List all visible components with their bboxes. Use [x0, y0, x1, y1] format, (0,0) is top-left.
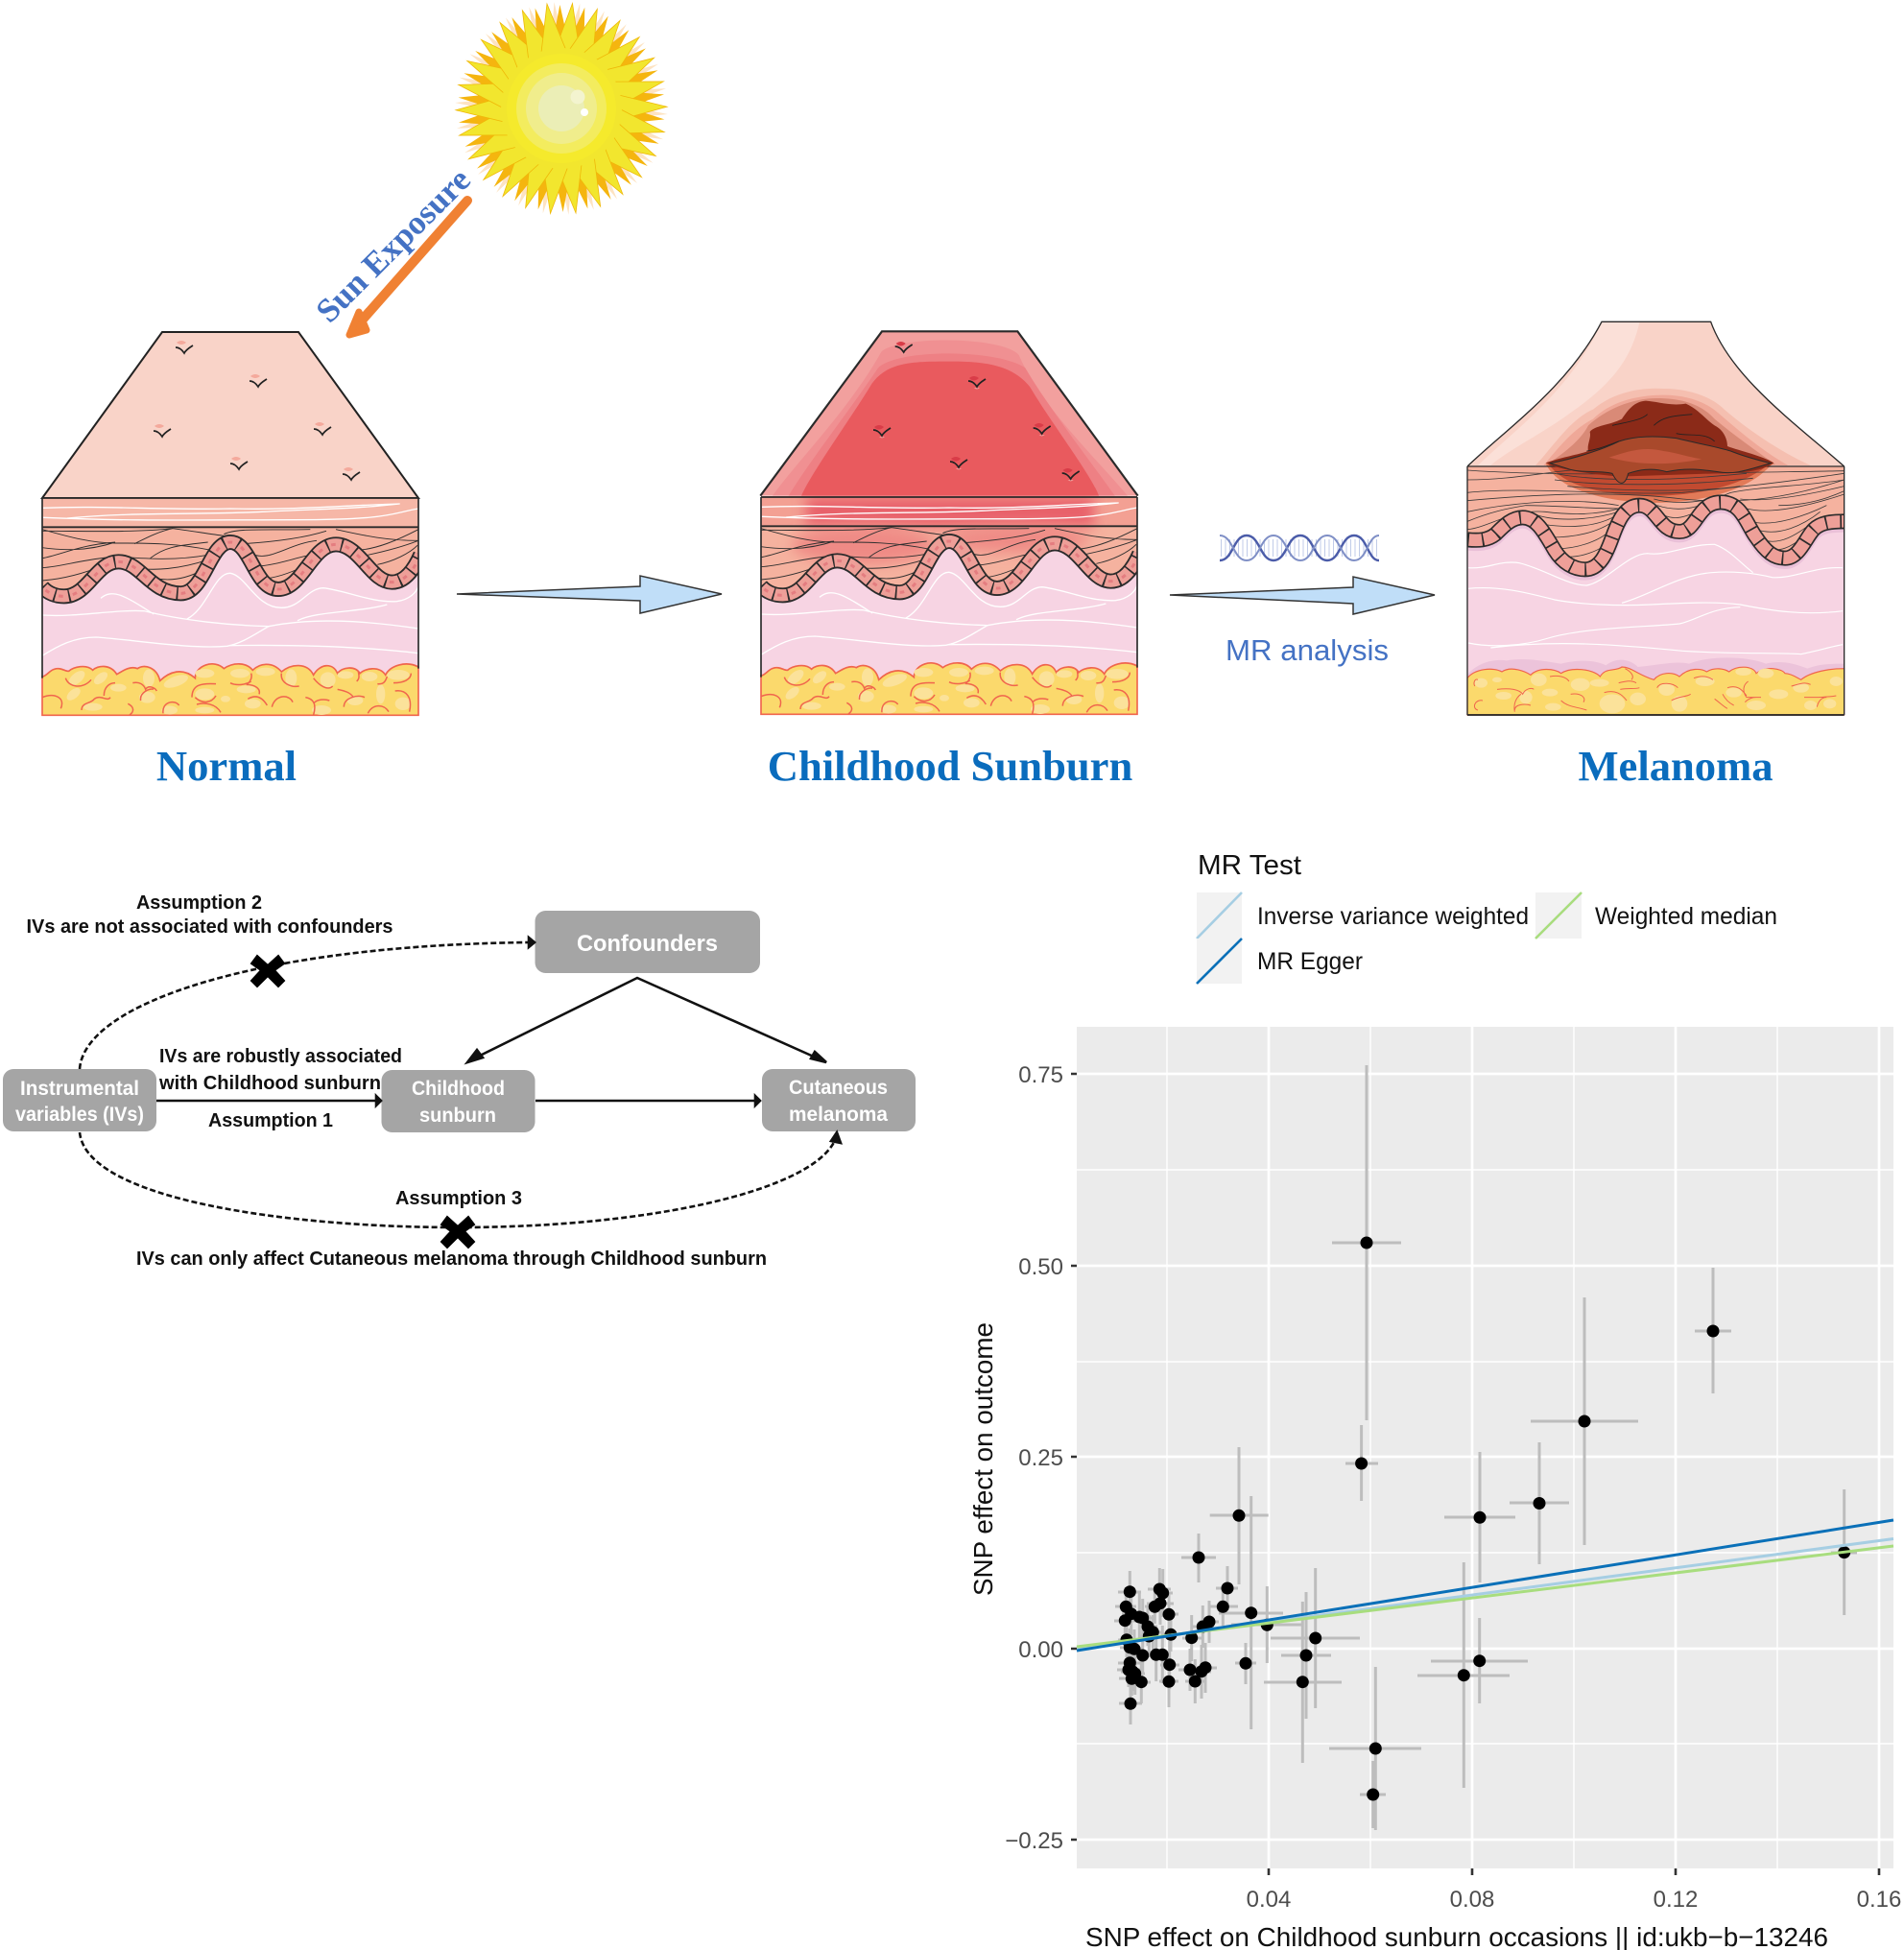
- legend key: inverse variance weighted: [1197, 892, 1529, 939]
- label: Melanoma: Melanoma: [1578, 742, 1773, 790]
- text: assumption 2: Assumption 2: [136, 892, 262, 914]
- legend: MR Test: MR Test: [1198, 850, 1301, 881]
- label: Normal: Normal: [156, 742, 297, 790]
- y axis labels: −0.25: [1005, 1828, 1063, 1854]
- text: assumption 1: Assumption 1: [208, 1110, 333, 1131]
- box: Instrumental variables: Instrumental: [20, 1078, 139, 1100]
- box: Instrumental variables: [3, 1069, 156, 1131]
- icon: sun: [437, 0, 686, 233]
- panel: MR assumptions diagram: [3, 892, 916, 1270]
- skin: childhood sunburn: [749, 331, 1150, 714]
- icon: cross on assumption 3: [441, 1217, 474, 1248]
- panel: skin stages: [42, 0, 1844, 790]
- data points: [1119, 1236, 1850, 1800]
- label: Sun Exposure: Sun Exposure: [309, 161, 478, 330]
- legend key: inverse variance weighted: Inverse variance weighted: [1257, 903, 1529, 930]
- arrow: sunburn to melanoma: [1170, 577, 1435, 614]
- y axis labels: 0.25: [1018, 1445, 1063, 1471]
- legend key: MR Egger: MR Egger: [1257, 948, 1363, 975]
- icon: cross on assumption 2: [251, 956, 284, 987]
- box: Childhood sunburn: sunburn: [419, 1105, 496, 1127]
- x axis labels: [1247, 1887, 1901, 1913]
- box: Cutaneous melanoma: melanoma: [789, 1104, 888, 1126]
- scatter plot: SNP effects: [968, 1027, 1901, 1950]
- x axis labels: 0.04: [1247, 1887, 1291, 1913]
- x axis labels: 0.08: [1450, 1887, 1494, 1913]
- skin: melanoma: [1467, 321, 1844, 715]
- box: Childhood sunburn: Childhood: [412, 1078, 505, 1100]
- text: assumption 1 description: IVs are robustly associated: [159, 1046, 402, 1067]
- text: assumption 2: [27, 892, 393, 938]
- box: Confounders: [536, 911, 760, 973]
- axis ticks: [1071, 1074, 1879, 1875]
- legend key: weighted median: Weighted median: [1595, 903, 1777, 930]
- x axis labels: 0.12: [1654, 1887, 1698, 1913]
- legend: MR Test: [1197, 850, 1777, 984]
- box: Childhood sunburn: [382, 1070, 536, 1132]
- text: assumption 1 description: with Childhood sunburn: [158, 1073, 381, 1094]
- y axis labels: 0.75: [1018, 1062, 1063, 1088]
- arrow: dashed to melanoma: [80, 1132, 841, 1227]
- text: assumption 3 description: IVs can only affect Cutaneous melanoma through Childhood sunburn: [136, 1248, 767, 1270]
- y axis labels: 0.00: [1018, 1637, 1063, 1663]
- arrow: sun exposure: [349, 201, 467, 335]
- y axis labels: [1005, 1062, 1063, 1854]
- box: Cutaneous melanoma: [762, 1069, 916, 1131]
- text: assumption 3: Assumption 3: [395, 1188, 522, 1209]
- regression lines: [1077, 1520, 1893, 1651]
- arrow: dashed to confounders: [80, 938, 535, 1069]
- skin: normal: [42, 332, 420, 715]
- icon: DNA helix: [1220, 535, 1379, 560]
- text: assumption 2: IVs are not associated with confounders: [27, 916, 393, 938]
- error bars: [1114, 1065, 1857, 1830]
- box: Instrumental variables: variables (IVs): [15, 1104, 144, 1126]
- box: Confounders: Confounders: [577, 931, 718, 957]
- arrow: normal to sunburn: [457, 576, 722, 613]
- legend key: weighted median: [1535, 892, 1777, 939]
- text: assumption 1 description: [158, 1046, 402, 1094]
- legend key: MR Egger: [1197, 939, 1363, 984]
- arrows: causal paths: [156, 978, 826, 1106]
- x axis labels: 0.16: [1857, 1887, 1901, 1913]
- box: Cutaneous melanoma: Cutaneous: [789, 1077, 888, 1099]
- label: Childhood Sunburn: Childhood Sunburn: [768, 742, 1132, 790]
- label: MR analysis: MR analysis: [1226, 633, 1389, 667]
- y axis labels: 0.50: [1018, 1254, 1063, 1280]
- plot panel: [1077, 1027, 1893, 1868]
- y axis title: SNP effect on outcome: [968, 1322, 998, 1596]
